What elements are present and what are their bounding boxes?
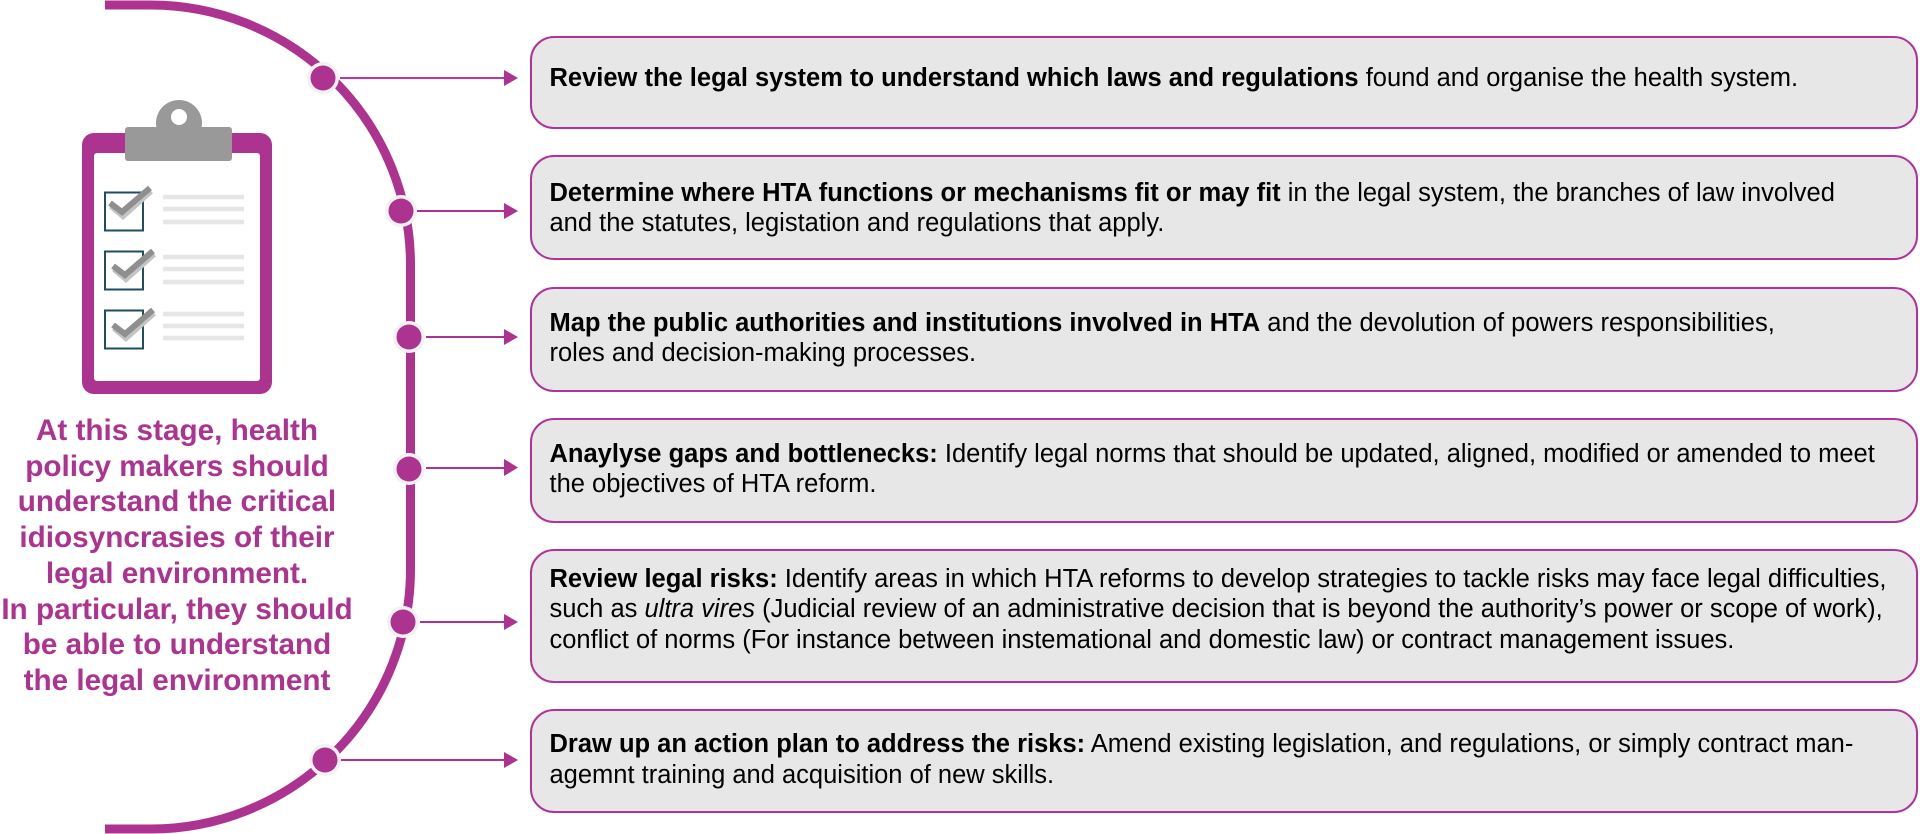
lead text: idiosyncrasies of their bbox=[19, 521, 335, 554]
lead text: In particular, they should bbox=[1, 593, 353, 626]
panel: review legal risks: such as ultra vires (Judicial review of an administrative decision that is beyond the authority’s power or scope of work), bbox=[550, 595, 1883, 623]
node and arrow 2 bbox=[385, 195, 518, 227]
lead text: the legal environment bbox=[24, 664, 330, 697]
panel: map public authorities bbox=[530, 287, 1918, 392]
panel: determine where HTA fits: and the statutes, legistation and regulations that apply. bbox=[550, 209, 1164, 237]
panel: determine where HTA fits bbox=[530, 155, 1918, 260]
panel: review legal risks: Review legal risks: Identify areas in which HTA reforms to develop strategies to tackle risks may face legal difficulties, bbox=[550, 564, 1887, 592]
lead text: legal environment. bbox=[46, 557, 308, 590]
panel: review legal risks bbox=[530, 549, 1918, 682]
clipboard icon bbox=[82, 100, 272, 394]
panel: analyse gaps: the objectives of HTA reform. bbox=[550, 470, 876, 498]
panel: determine where HTA fits: Determine where HTA functions or mechanisms fit or may fit in the legal system, the branches of law involved bbox=[550, 178, 1835, 206]
panel: analyse gaps bbox=[530, 418, 1918, 523]
panel: action plan: Draw up an action plan to address the risks: Amend existing legislation, and regulations, or simply contract man- bbox=[550, 730, 1853, 758]
node and arrow 4 bbox=[393, 453, 518, 485]
lead text: policy makers should bbox=[25, 450, 329, 483]
panel: review the legal system: Review the legal system to understand which laws and regulations found and organise the health system. bbox=[550, 64, 1798, 92]
lead text bbox=[1, 414, 353, 697]
node and arrow 6 bbox=[309, 744, 518, 776]
node and arrow 3 bbox=[393, 321, 518, 353]
curved timeline bbox=[105, 5, 410, 829]
panel: map public authorities: roles and decision-making processes. bbox=[550, 339, 976, 367]
panel: action plan: agemnt training and acquisition of new skills. bbox=[550, 760, 1054, 788]
panel: map public authorities: Map the public authorities and institutions involved in HTA and the devolution of powers responsibilities, bbox=[550, 308, 1775, 336]
panel: action plan bbox=[530, 708, 1918, 813]
lead text: At this stage, health bbox=[36, 414, 318, 447]
node and arrow 1 bbox=[307, 62, 518, 94]
node and arrow 5 bbox=[387, 606, 518, 638]
panel: analyse gaps: Anaylyse gaps and bottlenecks: Identify legal norms that should be updated, aligned, modified or amended to meet bbox=[550, 440, 1875, 468]
panel: review the legal system bbox=[530, 36, 1918, 129]
panel: review legal risks: conflict of norms (For instance between instemational and domestic law) or contract management issues. bbox=[550, 626, 1734, 654]
lead text: understand the critical bbox=[18, 485, 336, 518]
lead text: be able to understand bbox=[23, 628, 331, 661]
